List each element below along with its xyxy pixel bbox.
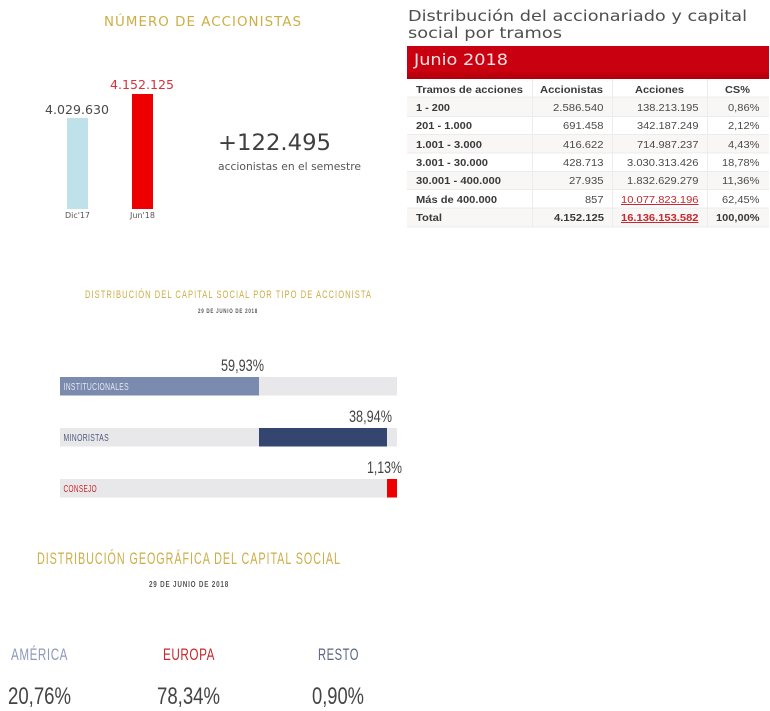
bar: institucionales: 59,93% bbox=[221, 356, 264, 375]
bar: consejo: 1,13% bbox=[367, 458, 402, 477]
stat: Resto: RESTO bbox=[318, 645, 359, 664]
stat: Europa: EUROPA bbox=[163, 645, 215, 664]
table: shareholders by bracket: 138.213.195 bbox=[637, 103, 699, 114]
table: shareholders by bracket: Acciones bbox=[635, 85, 684, 96]
table: shareholders by bracket: 1.001 - 3.000 bbox=[416, 140, 482, 151]
heading: tipo de accionista: DISTRIBUCIÓN DEL CAPITAL SOCIAL POR TIPO DE ACCIONISTA bbox=[85, 288, 372, 301]
table: shareholders by bracket: 714.987.237 bbox=[637, 140, 699, 151]
stat: Resto: 0,90% bbox=[312, 683, 364, 710]
stat: Resto bbox=[312, 645, 364, 710]
table band: Junio 2018: Junio 2018 bbox=[413, 50, 508, 69]
bar: minoristas: 38,94% bbox=[349, 407, 392, 426]
stat: América: 20,76% bbox=[8, 683, 71, 710]
stat: América bbox=[8, 645, 71, 710]
caption: semester change: accionistas en el semestre bbox=[218, 161, 361, 173]
table: shareholders by bracket: 30.001 - 400.000 bbox=[416, 176, 501, 187]
table: shareholders by bracket: Accionistas bbox=[540, 85, 603, 96]
axis label: Dic'17: Dic'17 bbox=[65, 211, 90, 220]
table: shareholders by bracket: Tramos de acciones bbox=[416, 85, 523, 96]
table: shareholders by bracket: 10.077.823.196 bbox=[621, 195, 699, 206]
heading: distribución por tramos bbox=[408, 7, 747, 42]
table: shareholders by bracket: 27.935 bbox=[569, 176, 604, 187]
heading: distribución por tramos: social por tramos bbox=[408, 24, 562, 42]
panel: distribución geográfica bbox=[8, 549, 364, 710]
table: shareholders by bracket: 18,78% bbox=[722, 158, 760, 169]
panel: capital social por tipo de accionista bbox=[60, 288, 402, 498]
panel: distribución por tramos bbox=[407, 7, 769, 227]
table: shareholders by bracket: 16.136.153.582 bbox=[621, 213, 699, 224]
table: shareholders by bracket: 2,12% bbox=[728, 121, 760, 132]
table: shareholders by bracket: 1.832.629.279 bbox=[627, 176, 699, 187]
table: shareholders by bracket: 4,43% bbox=[728, 140, 760, 151]
bar: Dic'17 bbox=[67, 118, 88, 209]
table: shareholders by bracket: 3.030.313.426 bbox=[627, 158, 699, 169]
table: shareholders by bracket: 857 bbox=[585, 195, 604, 206]
heading: distribución por tramos: Distribución del accionariado y capital bbox=[408, 7, 747, 25]
value: Jun'18: 4.152.125 bbox=[110, 77, 174, 92]
table: shareholders by bracket: 11,36% bbox=[722, 176, 760, 187]
value: Dic'17: 4.029.630 bbox=[45, 102, 109, 117]
table: shareholders by bracket: 691.458 bbox=[563, 121, 604, 132]
bar: minoristas bbox=[60, 407, 397, 446]
bar: consejo: CONSEJO bbox=[64, 484, 97, 495]
stat: Europa bbox=[157, 645, 220, 710]
table: shareholders by bracket: 2.586.540 bbox=[553, 103, 604, 114]
table: shareholders by bracket: CS% bbox=[725, 85, 750, 96]
bar: minoristas: MINORISTAS bbox=[64, 433, 109, 444]
stat: Europa: 78,34% bbox=[157, 683, 220, 710]
table: shareholders by bracket: 416.622 bbox=[563, 140, 604, 151]
table: shareholders by bracket: 0,86% bbox=[728, 103, 760, 114]
big number: semester change: +122.495 bbox=[218, 131, 331, 156]
table: shareholders by bracket: 62,45% bbox=[722, 195, 760, 206]
table: shareholders by bracket: Más de 400.000 bbox=[416, 195, 497, 206]
table: shareholders by bracket: 428.713 bbox=[563, 158, 604, 169]
stat: América: AMÉRICA bbox=[11, 645, 68, 664]
heading: distribución geográfica: DISTRIBUCIÓN GEOGRÁFICA DEL CAPITAL SOCIAL bbox=[37, 549, 341, 568]
bar: institucionales: INSTITUCIONALES bbox=[64, 382, 129, 393]
panel: número de accionistas bbox=[45, 14, 361, 220]
table: shareholders by bracket: 201 - 1.000 bbox=[416, 121, 472, 132]
table: shareholders by bracket: 100,00% bbox=[716, 213, 760, 224]
table: shareholders by bracket: 3.001 - 30.000 bbox=[416, 158, 488, 169]
bar: consejo bbox=[60, 458, 402, 498]
table: shareholders by bracket bbox=[407, 79, 769, 227]
bar: Jun'18 bbox=[132, 94, 153, 209]
table band: Junio 2018 bbox=[407, 46, 769, 79]
table: shareholders by bracket: 4.152.125 bbox=[554, 213, 604, 224]
table: shareholders by bracket: 1 - 200 bbox=[416, 103, 450, 114]
heading: número de accionistas: NÚMERO DE ACCIONISTAS bbox=[104, 14, 302, 30]
table: shareholders by bracket: 342.187.249 bbox=[637, 121, 699, 132]
date: 29 DE JUNIO DE 2018 bbox=[149, 580, 229, 589]
table: shareholders by bracket: Total bbox=[416, 213, 442, 224]
bar: institucionales bbox=[60, 356, 397, 396]
axis label: Jun'18: Jun'18 bbox=[129, 211, 155, 220]
date: 29 DE JUNIO DE 2018 bbox=[198, 309, 258, 315]
